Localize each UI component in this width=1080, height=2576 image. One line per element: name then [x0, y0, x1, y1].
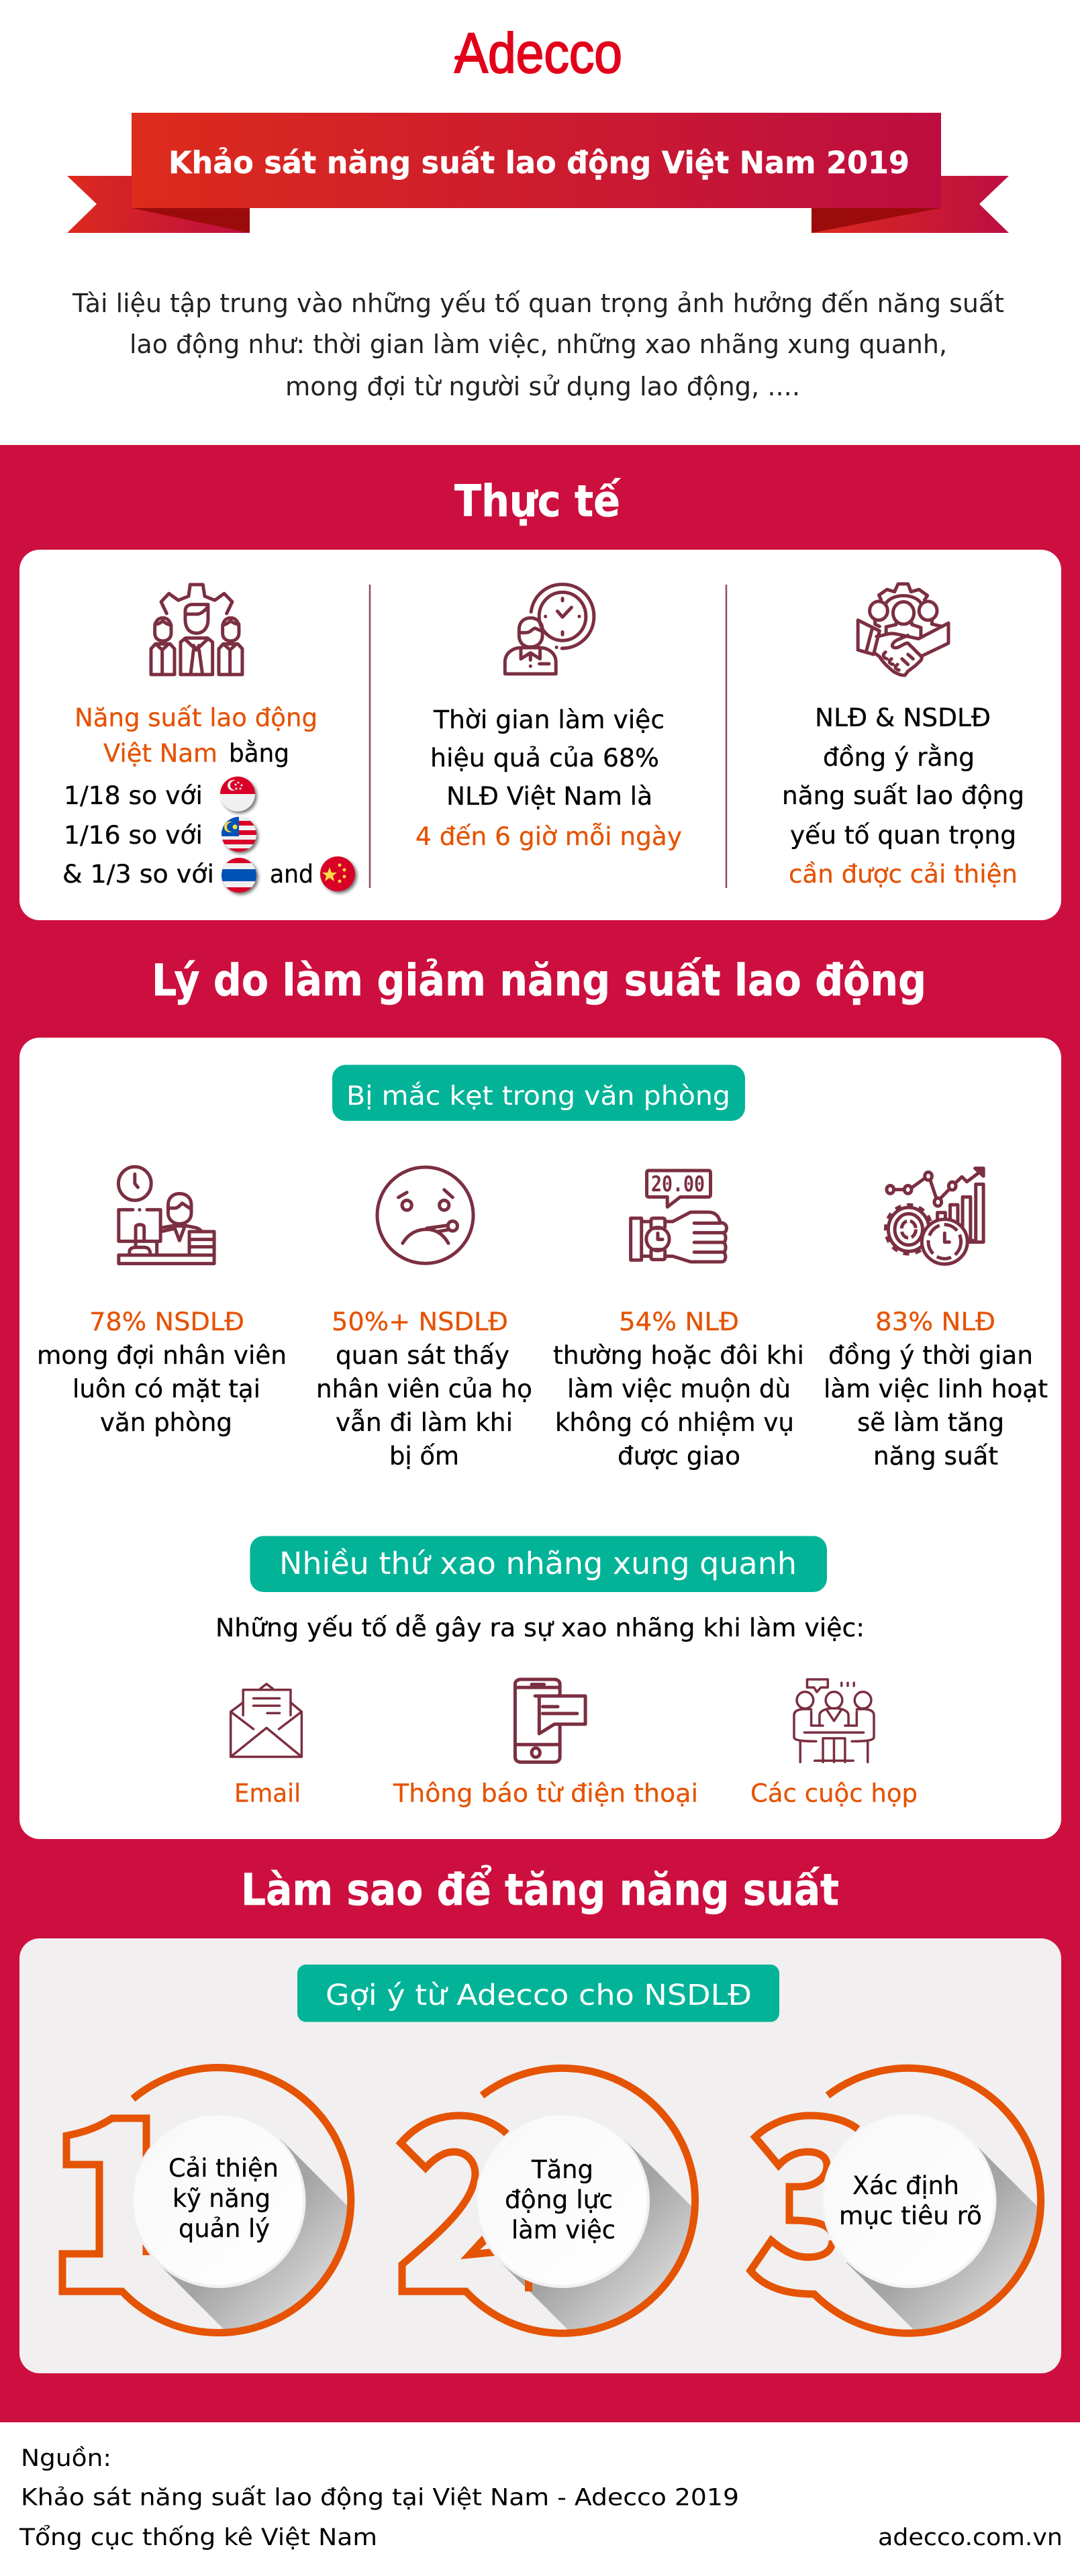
logo: Adecco: Adecco	[454, 21, 622, 85]
labels: distraction sources: Email	[234, 1779, 301, 1808]
stat: 54% NLĐ: 54% NLĐ	[619, 1307, 739, 1336]
intro text block: Tài liệu tập trung vào những yếu tố quan trọng ảnh hưởng đến năng suất	[72, 289, 1004, 318]
icon: sick face	[377, 1167, 473, 1263]
text: productivity comparison: Việt Nam	[103, 739, 217, 768]
step 2	[396, 2065, 699, 2337]
icon: email	[231, 1684, 301, 1756]
step 1	[59, 2064, 354, 2336]
step 1 text: kỹ năng	[173, 2184, 271, 2213]
heading: Thực tế: Thực tế	[454, 477, 621, 527]
pill: Gợi ý từ Adecco cho NSDLĐ	[297, 1965, 779, 2022]
text: agreement: NLĐ & NSDLĐ	[815, 703, 991, 732]
stat: 83% NLĐ: 83% NLĐ	[875, 1307, 995, 1336]
intro text block: lao động như: thời gian làm việc, những xao nhãng xung quanh,	[130, 330, 947, 359]
stat: 83% NLĐ: làm việc linh hoạt	[824, 1375, 1048, 1403]
icon: meeting	[794, 1679, 874, 1762]
text: working time	[415, 705, 682, 851]
text: productivity comparison	[62, 703, 317, 889]
stat: 50%+ NSDLĐ: quan sát thấy	[336, 1341, 509, 1370]
title text: Khảo sát năng suất lao động Việt Nam 2019	[168, 145, 910, 181]
stat: 78% NSDLĐ: 78% NSDLĐ	[89, 1307, 244, 1336]
labels: distraction sources: Các cuộc họp	[750, 1779, 918, 1808]
text: agreement: cần được cải thiện	[789, 860, 1018, 889]
text: productivity comparison: 1/18 so với	[64, 781, 203, 810]
intro text block	[72, 289, 1004, 401]
step 3 text	[839, 2171, 982, 2230]
icon: flag of Thailand	[222, 858, 258, 895]
panel: reasons	[19, 1038, 1061, 1839]
step 3 text: Xác định	[852, 2171, 959, 2200]
stat: 78% NSDLĐ: văn phòng	[100, 1408, 232, 1437]
red background	[0, 445, 1080, 2422]
panel: Thực tế	[19, 550, 1061, 920]
icon: phone with message	[515, 1679, 585, 1762]
footer: sources: Nguồn:	[21, 2445, 111, 2472]
stat: 54% NLĐ: được giao	[618, 1442, 740, 1471]
icon: flag of Singapore	[220, 777, 257, 813]
text: productivity comparison: bằng	[229, 739, 289, 768]
text: productivity comparison: and	[270, 860, 313, 889]
icon: flag of China	[320, 856, 357, 893]
icon: handshake with people and gear	[858, 584, 948, 675]
stat: 83% NLĐ: sẽ làm tăng	[857, 1408, 1004, 1437]
text: productivity comparison: & 1/3 so với	[62, 860, 214, 889]
stat: 54% NLĐ	[553, 1307, 804, 1471]
stat: 83% NLĐ: năng suất	[873, 1442, 998, 1471]
text: agreement: yếu tố quan trọng	[790, 821, 1016, 850]
icon: wristwatch with 20.00	[631, 1171, 726, 1262]
text: productivity comparison: Năng suất lao động	[75, 703, 317, 732]
pill: Nhiều thứ xao nhãng xung quanh	[250, 1536, 827, 1592]
icon: person with clock	[505, 585, 594, 674]
stat: 50%+ NSDLĐ: 50%+ NSDLĐ	[332, 1307, 508, 1336]
icon: gears, clock and growth chart	[886, 1169, 983, 1264]
step 1 text: Cải thiện	[168, 2154, 279, 2183]
labels: distraction sources: Thông báo từ điện thoại	[393, 1779, 698, 1808]
stat: 54% NLĐ: thường hoặc đôi khi	[553, 1341, 804, 1370]
step 3	[746, 2065, 1044, 2337]
footer: sources: Khảo sát năng suất lao động tại Việt Nam - Adecco 2019	[21, 2485, 739, 2512]
footer: sources: Tổng cục thống kê Việt Nam	[19, 2524, 377, 2551]
labels: distraction sources	[234, 1779, 918, 1808]
icon: flag of Malaysia	[222, 817, 258, 854]
stat: 54% NLĐ: không có nhiệm vụ	[555, 1408, 794, 1437]
footer: website: adecco.com.vn	[878, 2524, 1063, 2551]
text: working time: hiệu quả của 68%	[430, 744, 659, 773]
stat: 54% NLĐ: làm việc muộn dù	[567, 1375, 791, 1403]
text: working time: NLĐ Việt Nam là	[446, 782, 652, 811]
step 2 text: Tăng	[531, 2155, 593, 2184]
text: agreement: đồng ý rằng	[823, 743, 975, 772]
stat: 50%+ NSDLĐ	[316, 1307, 532, 1471]
stat: 83% NLĐ	[824, 1307, 1048, 1471]
step 3 text: mục tiêu rõ	[839, 2201, 982, 2230]
step 2 text: làm việc	[511, 2216, 616, 2244]
stat: 50%+ NSDLĐ: nhân viên của họ	[316, 1375, 532, 1403]
text: agreement: năng suất lao động	[782, 781, 1024, 810]
pill: Bị mắc kẹt trong văn phòng	[332, 1064, 745, 1121]
pill: Bị mắc kẹt trong văn phòng: Bị mắc kẹt trong văn phòng	[346, 1081, 730, 1111]
heading: Lý do làm giảm năng suất lao động: Lý do làm giảm năng suất lao động	[152, 956, 926, 1006]
heading: Làm sao để tăng năng suất: Làm sao để tăng năng suất	[241, 1865, 839, 1916]
stat: 78% NSDLĐ	[37, 1307, 287, 1437]
stat: 83% NLĐ: đồng ý thời gian	[828, 1341, 1033, 1370]
label on watch bubble: 20.00	[651, 1171, 705, 1197]
text: working time: Thời gian làm việc	[433, 705, 665, 734]
stat: 78% NSDLĐ: mong đợi nhân viên	[37, 1341, 287, 1370]
stat: 50%+ NSDLĐ: vẫn đi làm khi	[336, 1408, 513, 1437]
footer: sources	[19, 2445, 739, 2551]
stat: 78% NSDLĐ: luôn có mặt tại	[72, 1375, 260, 1403]
text: working time: 4 đến 6 giờ mỗi ngày	[415, 822, 682, 851]
text: agreement	[782, 703, 1024, 889]
step 1 text: quản lý	[179, 2214, 270, 2243]
step 1 text	[168, 2154, 279, 2243]
step 2 text	[505, 2155, 616, 2244]
stat: 50%+ NSDLĐ: bị ốm	[389, 1442, 459, 1471]
text: distraction intro: Những yếu tố dễ gây ra sự xao nhãng khi làm việc:	[215, 1614, 865, 1642]
icon: team with gear	[151, 585, 242, 675]
intro text block: mong đợi từ người sử dụng lao động, ....	[285, 372, 800, 401]
pill: Gợi ý từ Adecco cho NSDLĐ: Gợi ý từ Adecco cho NSDLĐ	[326, 1979, 752, 2012]
title ribbon	[67, 113, 1009, 233]
step 2 text: động lực	[505, 2185, 613, 2214]
icon: employee at desk	[118, 1167, 214, 1264]
text: productivity comparison: 1/16 so với	[64, 821, 203, 850]
panel: recommendations	[19, 1938, 1061, 2373]
pill: Nhiều thứ xao nhãng xung quanh: Nhiều thứ xao nhãng xung quanh	[279, 1546, 797, 1581]
